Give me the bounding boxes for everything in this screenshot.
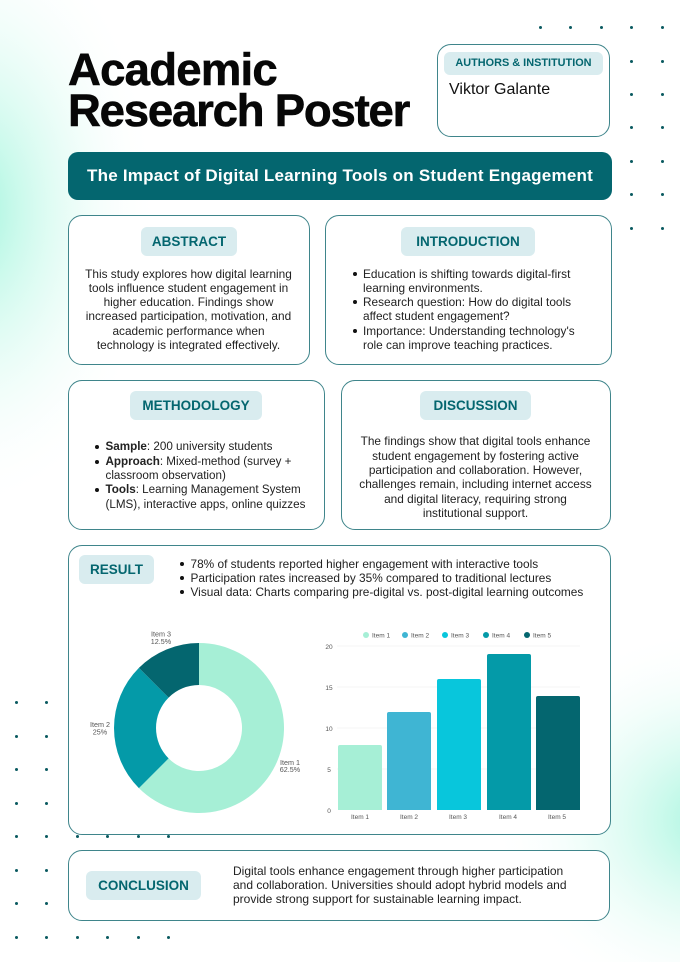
result heading <box>79 555 154 584</box>
introduction heading <box>401 227 535 256</box>
y axis labels: 10 <box>325 726 333 733</box>
subtitle banner <box>68 152 612 200</box>
title <box>68 44 410 136</box>
methodology heading <box>130 391 262 420</box>
x axis labels: Item 2 <box>400 814 418 821</box>
legend <box>363 632 551 640</box>
discussion text: participation and collaboration. However, <box>369 463 582 477</box>
label: item 3: Item 3 <box>151 630 171 638</box>
label: item 1: Item 1 <box>280 758 300 767</box>
label: item 1: 62.5% <box>280 765 300 774</box>
title: Research Poster <box>68 85 409 136</box>
x axis labels: Item 4 <box>499 814 517 821</box>
authors heading: AUTHORS & INSTITUTION <box>455 57 592 69</box>
label: item 2: 25% <box>93 728 108 736</box>
discussion text: student engagement by fostering active <box>372 449 579 463</box>
legend: Item 4 <box>492 632 510 640</box>
abstract text <box>85 266 292 352</box>
panel: authors and institution <box>437 44 610 137</box>
author name: Viktor Galante <box>449 81 550 98</box>
conclusion text <box>233 864 567 906</box>
abstract text: technology is integrated effectively. <box>97 338 280 352</box>
discussion heading: DISCUSSION <box>433 398 518 413</box>
y axis labels: 0 <box>327 808 331 815</box>
slice: item 1 <box>139 643 284 813</box>
x axis labels: Item 5 <box>548 814 566 821</box>
y axis labels: 15 <box>325 685 333 692</box>
bar chart <box>325 632 580 821</box>
abstract text: This study explores how digital learning <box>85 266 292 280</box>
result bullets: 78% of students reported higher engagement with interactive tools <box>190 556 538 570</box>
title: Academic <box>68 44 277 94</box>
y axis labels: 20 <box>325 644 333 651</box>
panel: conclusion <box>68 850 610 921</box>
abstract text: higher education. Findings show <box>104 295 273 309</box>
introduction bullets: affect student engagement? <box>363 309 510 323</box>
methodology bullets: Approach: Mixed-method (survey + <box>106 455 291 468</box>
introduction bullets <box>353 266 575 352</box>
discussion heading <box>420 391 531 420</box>
y axis labels: 5 <box>327 767 331 774</box>
methodology bullets: Tools: Learning Management System <box>106 483 301 496</box>
conclusion heading: CONCLUSION <box>98 878 189 893</box>
discussion text: institutional support. <box>423 506 528 520</box>
panel: introduction <box>325 215 612 365</box>
result bullets: Participation rates increased by 35% compared to traditional lectures <box>190 571 551 585</box>
conclusion text: and collaboration. Universities should adopt hybrid models and <box>233 878 567 892</box>
result heading: RESULT <box>90 562 143 577</box>
panel: result <box>68 545 611 835</box>
introduction bullets: Importance: Understanding technology's <box>363 324 575 338</box>
panel: abstract <box>68 215 310 365</box>
methodology bullets: (LMS), interactive apps, online quizzes <box>106 498 305 511</box>
result bullets: Visual data: Charts comparing pre-digital vs. post-digital learning outcomes <box>190 585 583 599</box>
introduction heading: INTRODUCTION <box>416 234 520 249</box>
introduction bullets: learning environments. <box>363 281 483 295</box>
label: item 2: Item 2 <box>90 720 110 729</box>
panel: methodology <box>68 380 325 530</box>
authors heading <box>444 52 603 75</box>
conclusion text: provide strong support for sustainable learning impact. <box>233 892 522 906</box>
discussion text: challenges remain, including internet access <box>359 477 592 491</box>
label: item 3: 12.5% <box>151 637 172 646</box>
subtitle banner: The Impact of Digital Learning Tools on Student Engagement <box>87 166 593 185</box>
introduction bullets: Education is shifting towards digital-first <box>363 266 570 280</box>
discussion text: The findings show that digital tools enhance <box>361 434 590 448</box>
abstract heading <box>141 227 237 256</box>
methodology heading: METHODOLOGY <box>142 398 250 413</box>
methodology bullets <box>95 440 305 511</box>
introduction bullets: Research question: How do digital tools <box>363 295 571 309</box>
introduction bullets: role can improve teaching practices. <box>363 338 553 352</box>
conclusion text: Digital tools enhance engagement through higher participation <box>233 864 563 878</box>
y axis labels <box>325 644 333 815</box>
discussion text <box>359 434 592 520</box>
result bullets <box>180 556 583 599</box>
panel: discussion <box>341 380 611 530</box>
abstract text: tools influence student engagement in <box>89 281 288 295</box>
bars <box>338 654 580 810</box>
abstract text: academic performance when <box>112 324 265 338</box>
x axis labels: Item 1 <box>351 814 369 821</box>
slice: item 2 <box>114 668 169 788</box>
legend: Item 3 <box>451 632 469 640</box>
legend: Item 1 <box>372 632 390 640</box>
donut chart <box>90 630 300 813</box>
methodology bullets: classroom observation) <box>106 469 226 482</box>
abstract heading: ABSTRACT <box>152 234 226 249</box>
legend: Item 5 <box>533 632 551 640</box>
legend: Item 2 <box>411 632 429 640</box>
methodology bullets: Sample: 200 university students <box>106 440 272 453</box>
x axis labels <box>351 814 566 821</box>
discussion text: and digital literacy, requiring strong <box>384 492 567 506</box>
conclusion heading <box>86 871 201 900</box>
abstract text: increased participation, motivation, and <box>86 309 291 323</box>
x axis labels: Item 3 <box>449 814 467 821</box>
slice: item 3 <box>139 643 199 698</box>
